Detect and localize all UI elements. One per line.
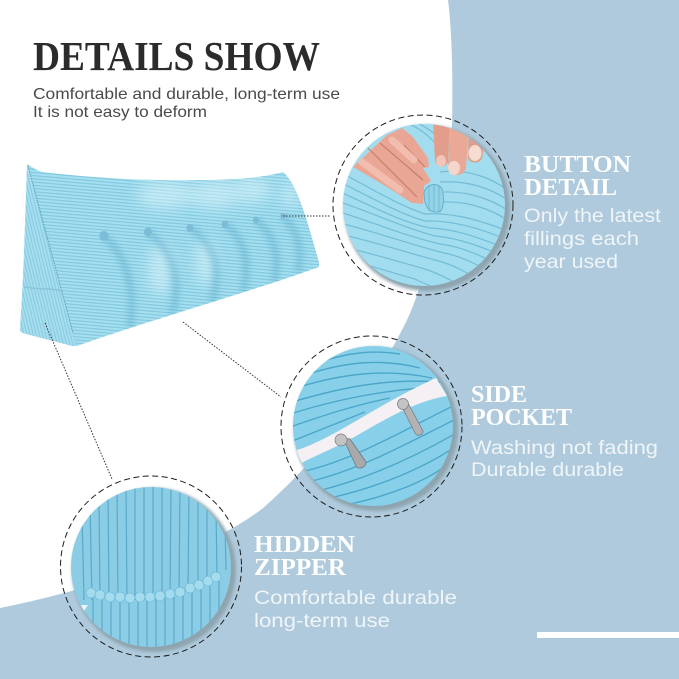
top fingers: [433, 124, 484, 176]
pillow front face: [27, 164, 319, 346]
hand: three fingers: [353, 128, 431, 204]
fingernails: [436, 155, 446, 167]
finger separators: [368, 143, 425, 197]
pillow seam: [28, 166, 73, 333]
text block: button detail: [524, 152, 662, 273]
text block: button detail: BUTTON: [524, 152, 632, 178]
wedge pillow: [20, 164, 319, 346]
pillow tuft shadows: [104, 216, 300, 328]
text block: hidden zipper: long-term use: [254, 611, 390, 632]
text block: button detail: Only the latest: [524, 206, 662, 227]
subtitle: Comfortable and durable, long-term use: [33, 86, 340, 103]
text block: hidden zipper: HIDDEN: [254, 532, 356, 558]
detail circle: side pocket: [281, 336, 462, 517]
corduroy close-up with hand: [343, 124, 505, 286]
zipper pull right: [398, 398, 423, 435]
finger highlight: [362, 140, 414, 190]
white zipper band: [290, 378, 447, 464]
circle shadow: [344, 125, 510, 291]
subtitle: It is not easy to deform: [33, 104, 207, 121]
text block: side pocket: SIDE: [471, 382, 527, 408]
zipper pull left: [335, 434, 366, 468]
text block: button detail: DETAIL: [524, 175, 617, 201]
text block: side pocket: [471, 382, 658, 481]
text block: side pocket: POCKET: [471, 405, 572, 431]
pinched button: [424, 184, 443, 212]
corduroy close-up with flap: [70, 485, 232, 650]
dashed circle: [333, 115, 513, 295]
text block: hidden zipper: Comfortable durable: [254, 588, 457, 609]
text block: hidden zipper: ZIPPER: [254, 555, 347, 581]
dashed circle: [60, 476, 242, 657]
circle shadow: [294, 347, 458, 511]
tufted buttons: [100, 213, 286, 241]
pillow highlights: [137, 177, 298, 296]
pillow pocket edge: [25, 287, 63, 291]
title: DETAILS SHOW: [33, 33, 320, 79]
text block: button detail: fillings each: [524, 229, 639, 250]
small white corner: [80, 605, 88, 611]
dotted leader lines: [45, 216, 330, 479]
white curved area: [0, 0, 452, 608]
white accent bar: [537, 632, 679, 638]
subtitle: [33, 86, 340, 121]
dashed circle: [281, 336, 462, 517]
circle shadow: [72, 488, 236, 652]
text block: side pocket: Durable durable: [471, 460, 624, 481]
text block: hidden zipper: [254, 532, 457, 632]
flap beads: [86, 572, 221, 603]
text block: button detail: year used: [524, 252, 618, 273]
pillow side face: [20, 164, 77, 346]
corduroy close-up with zipper: [290, 345, 460, 510]
detail circle: button: [333, 115, 513, 295]
detail circle: hidden zipper: [60, 476, 242, 657]
text block: side pocket: Washing not fading: [471, 438, 658, 459]
